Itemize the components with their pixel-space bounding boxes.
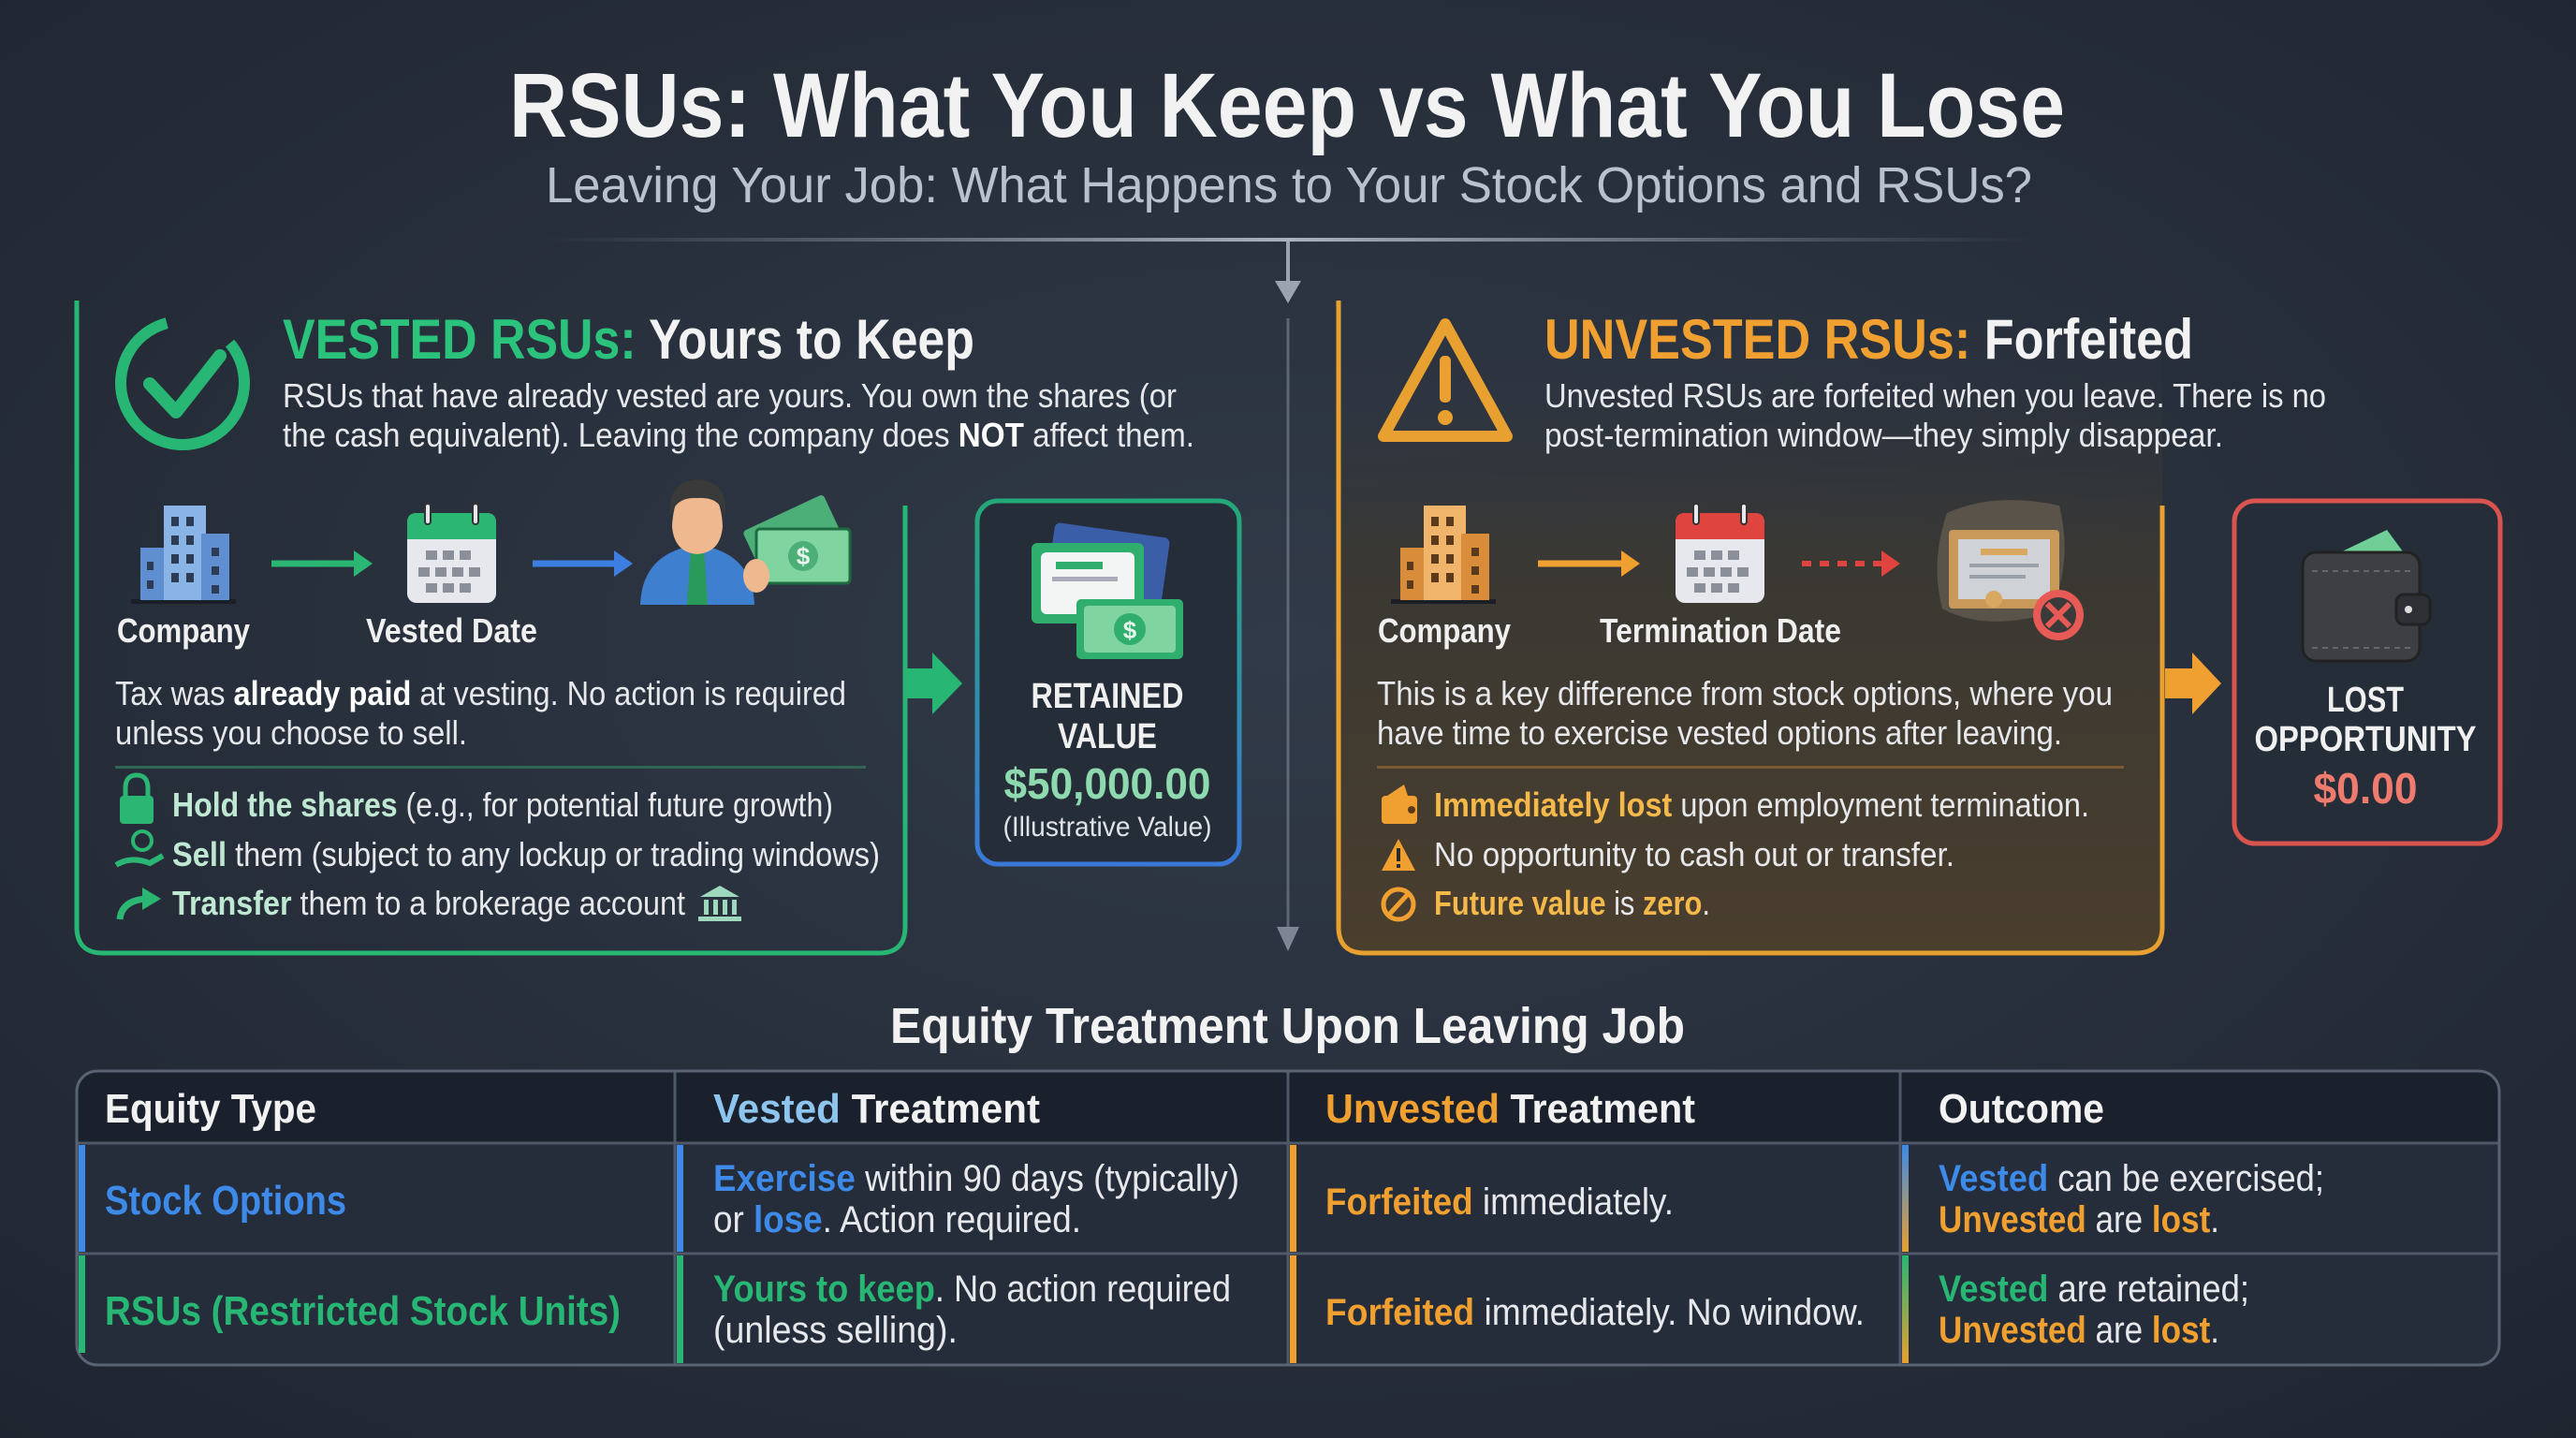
table row: rsus: Forfeited immediately. No window.: [1325, 1292, 1865, 1333]
text: unvested description: Unvested RSUs are forfeited when you leave. There is no: [1544, 376, 2326, 415]
list: unvested consequences: [1382, 785, 2089, 922]
arrow: red dashed: [1802, 550, 1900, 577]
heading: vested: VESTED RSUs: Yours to Keep: [283, 308, 974, 371]
callout: retained value: [977, 501, 1239, 864]
heading: table: Equity Treatment Upon Leaving Job: [890, 998, 1685, 1054]
callout: retained value: (Illustrative Value): [1003, 812, 1211, 843]
list: vested options: Sell them (subject to any lockup or trading windows): [172, 835, 880, 873]
heading: unvested: UNVESTED RSUs: Forfeited: [1544, 308, 2193, 371]
table row: stock options: or lose. Action required.: [713, 1199, 1081, 1240]
icon: money stack: [1032, 522, 1183, 659]
callout: retained value: VALUE: [1058, 717, 1157, 756]
text: key difference: [1377, 674, 2113, 752]
icon: person with money: [640, 479, 850, 605]
callout: retained value: $50,000.00: [1003, 759, 1211, 808]
icon: bank: [698, 886, 741, 921]
table row: stock options: Forfeited immediately.: [1325, 1181, 1674, 1223]
text: tax note: [115, 674, 846, 752]
text: vested description: the cash equivalent). Leaving the company does NOT affect them.: [283, 416, 1194, 454]
icon: person with money: $: [797, 542, 811, 570]
arrow: big green: [903, 653, 962, 714]
panel: unvested: [1339, 301, 2326, 953]
list: vested options: Hold the shares (e.g., for potential future growth): [172, 785, 833, 824]
list: vested options: [116, 775, 880, 922]
callout: lost opportunity: OPPORTUNITY: [2254, 720, 2477, 759]
icon: money stack: $: [1123, 616, 1137, 644]
table header: [105, 1086, 2104, 1132]
list: unvested consequences: Future value is zero.: [1434, 884, 1710, 922]
icon: lock: [120, 775, 154, 824]
table row: rsus: (unless selling).: [713, 1310, 958, 1351]
table row: stock options: [105, 1158, 2324, 1240]
subtitle: Leaving Your Job: What Happens to Your Stock Options and RSUs?: [546, 157, 2032, 213]
icon: calendar green: [407, 504, 496, 603]
icon: wallet small: [1382, 785, 1417, 824]
icon: check circle: [95, 296, 270, 470]
text: unvested description: post-termination window—they simply disappear.: [1544, 416, 2223, 454]
icon: no sign: [1383, 889, 1413, 919]
table row: rsus: [105, 1269, 2249, 1351]
list: vested options: Transfer them to a brokerage account: [172, 884, 685, 922]
icon: wallet: [2303, 530, 2430, 661]
text: key difference: This is a key difference from stock options, where you: [1377, 674, 2113, 712]
table row: stock options: Vested can be exercised;: [1939, 1158, 2324, 1199]
table row: stock options: Unvested are lost.: [1939, 1199, 2219, 1240]
callout: lost opportunity: LOST: [2327, 681, 2404, 720]
table row: stock options: Exercise within 90 days (typically): [713, 1158, 1239, 1199]
table header: Outcome: [1939, 1086, 2104, 1132]
table row: rsus: Unvested are lost.: [1939, 1310, 2219, 1351]
icon: company building blue: [131, 506, 236, 604]
table header: Vested Treatment: [713, 1086, 1040, 1132]
table row: rsus: Vested are retained;: [1939, 1269, 2249, 1310]
title: RSUs: What You Keep vs What You Lose: [509, 54, 2065, 156]
label: company: Company: [1378, 611, 1511, 650]
icon: company building orange: [1391, 506, 1496, 604]
text: vested description: RSUs that have already vested are yours. You own the shares (or: [283, 376, 1177, 415]
table header: Unvested Treatment: [1325, 1086, 1695, 1132]
text: tax note: unless you choose to sell.: [115, 713, 467, 752]
table header: Equity Type: [105, 1086, 316, 1132]
table row: rsus: RSUs (Restricted Stock Units): [105, 1288, 621, 1334]
label: company: Company: [117, 611, 250, 650]
icon: hand coin: [116, 831, 163, 865]
icon: void certificate: [1938, 500, 2084, 640]
arrow: green: [271, 550, 373, 577]
table: equity treatment: [77, 1071, 2499, 1365]
table row: rsus: Yours to keep. No action required: [713, 1269, 1231, 1310]
panel: vested: [77, 296, 1194, 953]
arrow: split down: [1275, 242, 1301, 951]
icon: calendar red: [1676, 504, 1764, 603]
text: tax note: Tax was already paid at vesting. No action is required: [115, 674, 846, 712]
arrow: big orange: [2165, 653, 2221, 714]
list: unvested consequences: Immediately lost upon employment termination.: [1434, 785, 2089, 824]
icon: transfer arrow: [120, 888, 161, 919]
label: vested date: Vested Date: [366, 611, 537, 650]
callout: retained value: RETAINED: [1032, 677, 1183, 716]
arrow: orange: [1538, 550, 1640, 577]
callout: lost opportunity: $0.00: [2314, 764, 2417, 813]
icon: warning triangle: [1383, 324, 1507, 436]
arrow: blue: [533, 550, 633, 577]
text: key difference: have time to exercise vested options after leaving.: [1377, 713, 2062, 752]
table row: stock options: Stock Options: [105, 1178, 346, 1224]
icon: small warning: [1382, 839, 1415, 871]
callout: lost opportunity: [2234, 501, 2500, 844]
list: unvested consequences: No opportunity to cash out or transfer.: [1434, 835, 1954, 873]
label: termination date: Termination Date: [1600, 611, 1841, 650]
text: vested description: [283, 376, 1194, 454]
text: unvested description: [1544, 376, 2326, 454]
